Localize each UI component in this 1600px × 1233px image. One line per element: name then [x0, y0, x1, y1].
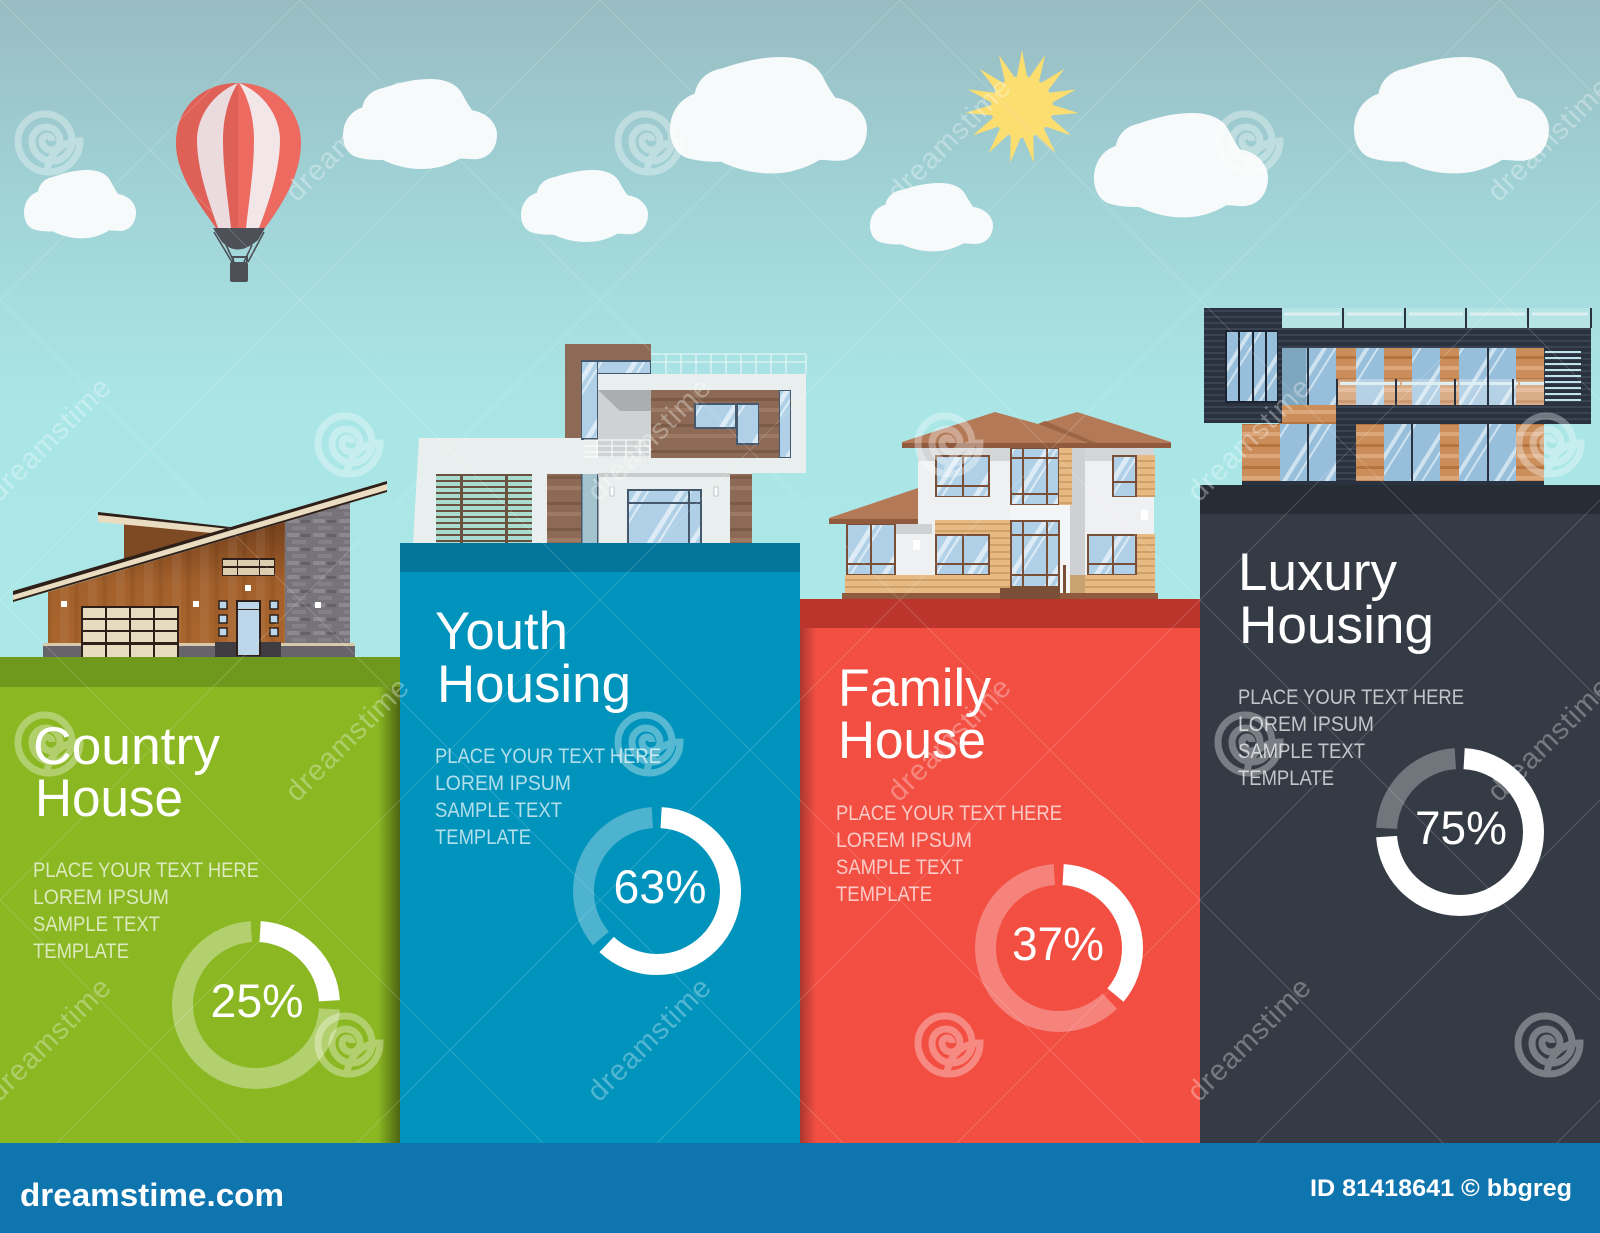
heading: Family House: Family	[838, 659, 991, 718]
heading: Youth Housing	[435, 602, 631, 714]
text block: SAMPLE TEXT	[1238, 740, 1365, 763]
footer logo text: dreamstime.com	[20, 1177, 284, 1213]
text block	[33, 859, 259, 963]
house: country house	[13, 481, 387, 657]
text block: TEMPLATE	[836, 883, 932, 906]
house: youth modern house	[413, 344, 806, 543]
watermark overlay: dreamstime	[279, 671, 416, 808]
donut chart: 75%: 75%	[1415, 801, 1507, 854]
footer bar	[0, 1143, 1600, 1233]
text block	[836, 802, 1062, 906]
text block	[435, 745, 661, 849]
heading: Country House: House	[35, 769, 183, 828]
text block: SAMPLE TEXT	[435, 799, 562, 822]
panel: family house	[800, 599, 1200, 1143]
clouds	[24, 57, 1549, 251]
heading: Luxury Housing: Housing	[1239, 596, 1434, 655]
text block: SAMPLE TEXT	[836, 856, 963, 879]
heading: Country House	[33, 717, 221, 828]
watermark overlay: dreamstime	[881, 71, 1018, 208]
heading: Family House: House	[838, 711, 986, 770]
sky background	[0, 0, 1600, 660]
heading: Luxury Housing	[1238, 543, 1434, 655]
text block: LOREM IPSUM	[33, 886, 169, 909]
heading: Youth Housing: Youth	[435, 602, 568, 661]
text block: TEMPLATE	[435, 826, 531, 849]
text block: LOREM IPSUM	[1238, 713, 1374, 736]
donut chart: 25%	[182, 932, 330, 1078]
text block: PLACE YOUR TEXT HERE	[33, 859, 259, 882]
heading: Family House	[838, 659, 991, 770]
heading: Luxury Housing: Luxury	[1238, 543, 1397, 602]
panel: luxury housing	[1200, 485, 1600, 1143]
footer image credit: ID 81418641 © bbgreg	[1310, 1175, 1572, 1202]
text block	[1238, 686, 1464, 790]
text block: TEMPLATE	[1238, 767, 1334, 790]
donut chart: 63%: 63%	[614, 860, 706, 913]
watermark overlay: dreamstime	[1181, 971, 1318, 1108]
house: family house	[829, 412, 1171, 599]
text block: LOREM IPSUM	[435, 772, 571, 795]
donut chart: 75%	[1386, 758, 1534, 906]
watermark overlay: dreamstime	[581, 371, 718, 508]
text block: PLACE YOUR TEXT HERE	[1238, 686, 1464, 709]
donut chart: 37%: 37%	[1012, 917, 1104, 970]
text block: SAMPLE TEXT	[33, 913, 160, 936]
watermark overlay: dreamstime	[881, 671, 1018, 808]
icon: hot air balloon	[176, 83, 301, 282]
text block: PLACE YOUR TEXT HERE	[836, 802, 1062, 825]
icon: sun	[965, 50, 1079, 164]
watermark overlay: dreamstime	[279, 71, 416, 208]
watermark overlay: dreamstime	[581, 971, 718, 1108]
panel: country house	[0, 657, 400, 1143]
text block: TEMPLATE	[33, 940, 129, 963]
donut chart: 25%: 25%	[210, 974, 304, 1027]
donut chart: 37%	[986, 874, 1132, 1022]
text block: PLACE YOUR TEXT HERE	[435, 745, 661, 768]
house: luxury house	[1204, 308, 1592, 485]
heading: Youth Housing: Housing	[437, 655, 631, 714]
text block: LOREM IPSUM	[836, 829, 972, 852]
heading: Country House: Country	[33, 717, 221, 776]
watermark overlay: dreamstime	[1181, 371, 1318, 508]
donut chart: 63%	[584, 818, 730, 964]
panel: youth housing	[400, 543, 800, 1143]
